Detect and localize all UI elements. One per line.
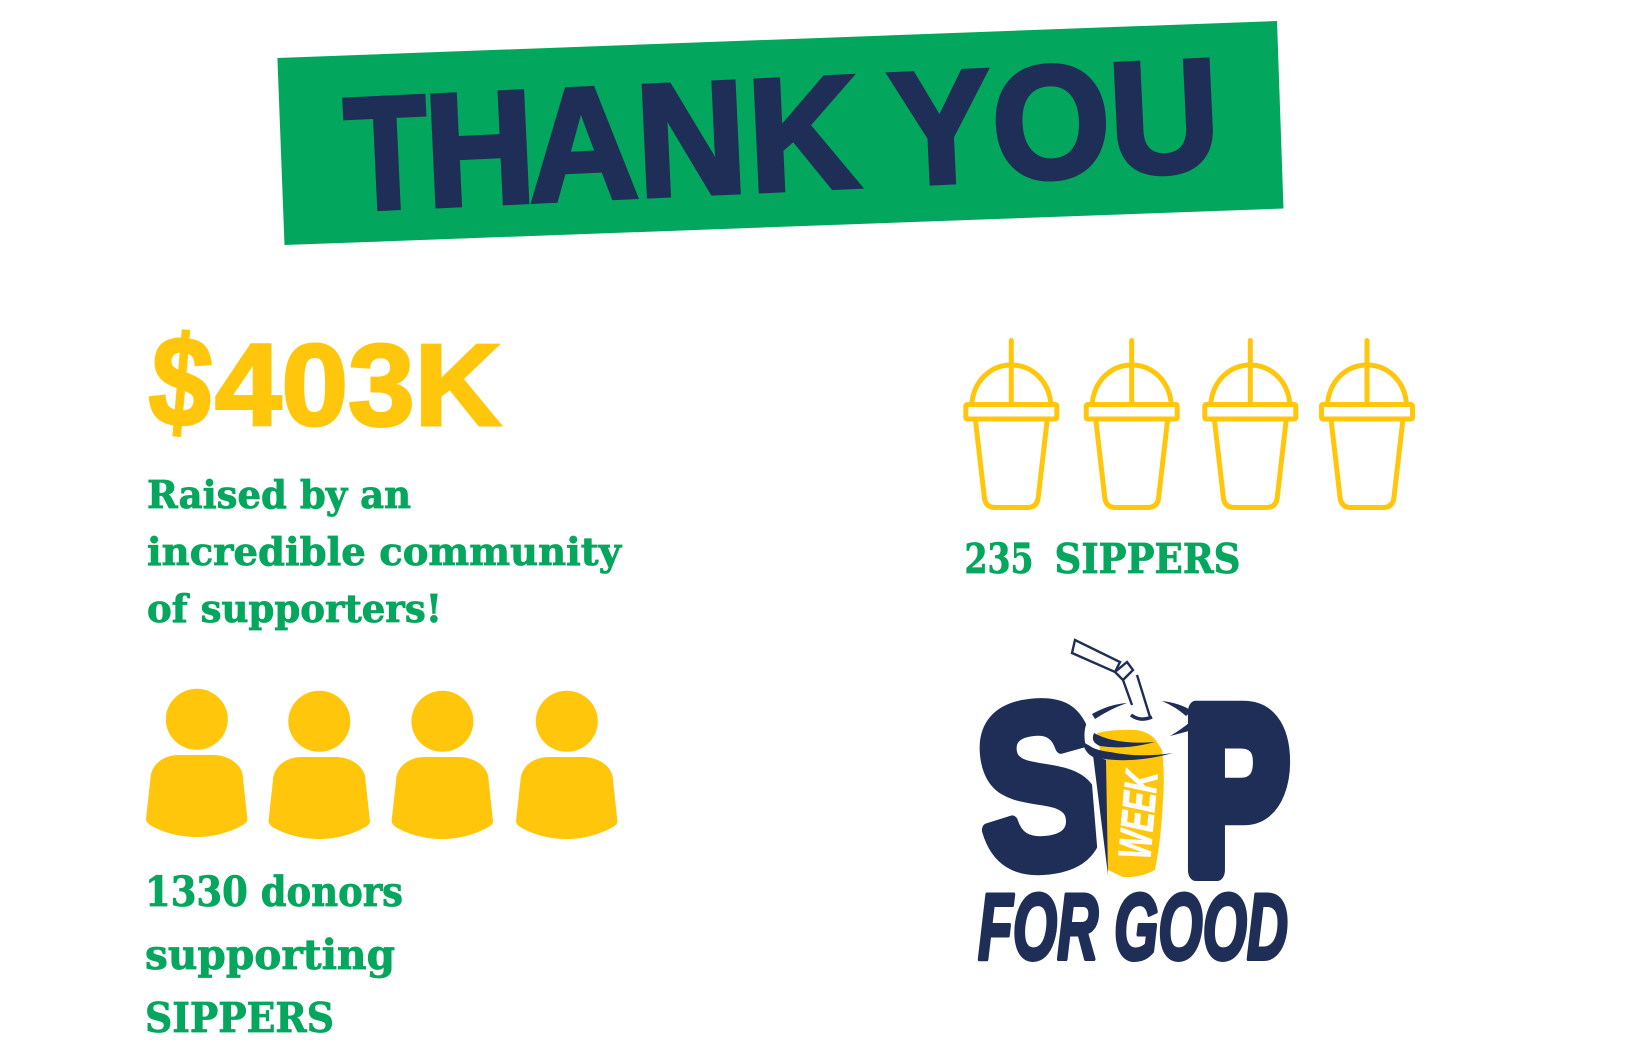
logo letter P: P — [1185, 662, 1288, 919]
text: raised description — [147, 473, 623, 632]
icon: donor 4 — [516, 691, 617, 839]
title banner: T — [341, 61, 431, 244]
text: sippers count — [964, 535, 1240, 583]
text: donors description: supporting — [145, 931, 395, 979]
icon: cup 2 — [1086, 340, 1177, 508]
text: donors description: SIPPERS — [145, 994, 334, 1042]
icon: cup 3 — [1205, 340, 1296, 508]
logo letter S: S — [965, 652, 1114, 921]
text: sippers count: SIPPERS — [1054, 535, 1240, 583]
text: donors description — [145, 868, 403, 1042]
logo straw — [1072, 640, 1152, 719]
icon: donor 1 — [146, 689, 247, 837]
logo WEEK label: WEEK — [1108, 767, 1168, 861]
title banner: HANK YOU — [421, 26, 1223, 241]
stat: amount raised — [144, 308, 501, 456]
icon: cup 1 — [966, 340, 1057, 508]
text: sippers count: 235 — [964, 535, 1034, 583]
icons: four donors — [146, 689, 617, 839]
stat: amount raised: $ — [144, 308, 218, 456]
text: raised description: Raised by an — [147, 473, 411, 518]
text: raised description: incredible community — [147, 530, 623, 575]
icon: donor 3 — [392, 691, 493, 839]
icons: four cups — [966, 340, 1412, 508]
text: donors description: 1330 donors — [145, 868, 403, 916]
text: raised description: of supporters! — [147, 587, 442, 632]
logo: Sip Week for Good — [965, 640, 1288, 979]
icon: donor 2 — [268, 691, 370, 839]
stat: amount raised: 403K — [215, 320, 501, 450]
logo FOR GOOD: FOR GOOD — [978, 874, 1288, 979]
logo cup — [1072, 640, 1192, 882]
icon: cup 4 — [1322, 340, 1412, 508]
